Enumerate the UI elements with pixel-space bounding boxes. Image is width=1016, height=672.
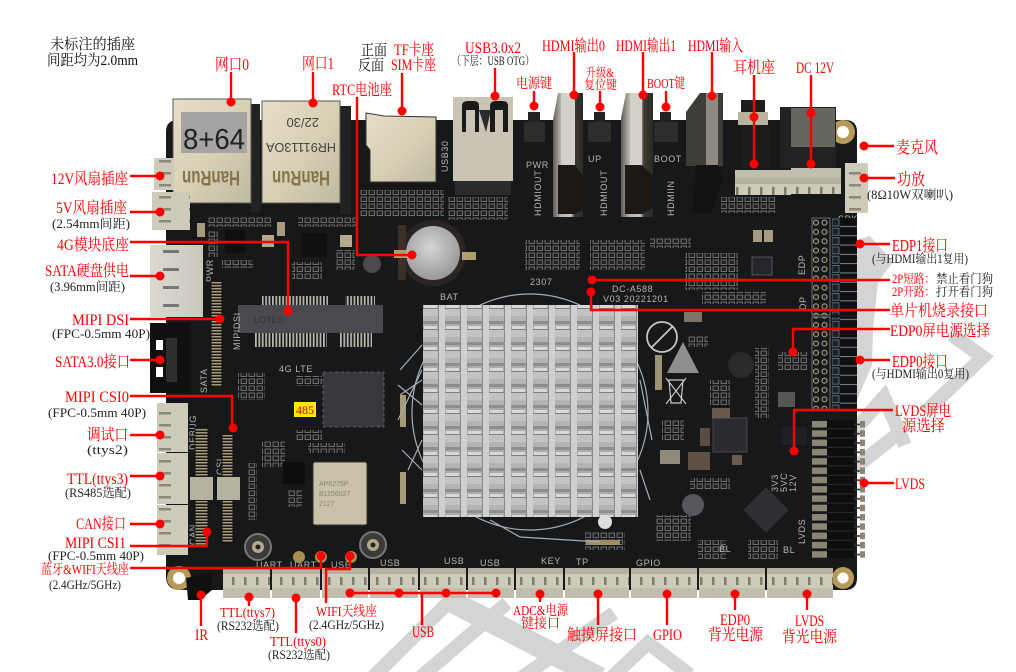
board silkscreen: 5VC — [779, 473, 789, 492]
label: GPIO — [653, 590, 682, 644]
label: ADC&电源键接口 — [513, 590, 569, 632]
board silkscreen: BL — [783, 545, 795, 555]
board silkscreen — [188, 140, 858, 570]
label: LVDS屏电源选择: 源选择 — [902, 417, 945, 435]
CAN connector — [157, 505, 188, 555]
label: LVDS屏电源选择 — [790, 402, 951, 456]
label: DC 12V — [796, 60, 834, 168]
DC 12V jack — [780, 107, 836, 168]
label: TTL(ttys7) — [217, 592, 279, 633]
label: 5V风扇插座: 5V风扇插座 — [56, 198, 127, 217]
board silkscreen: LVDS — [797, 519, 807, 544]
WiFi module — [313, 462, 367, 525]
label: 蓝牙&WIFI天线座: (2.4GHz/5GHz) — [49, 578, 121, 592]
board silkscreen: SATA — [199, 368, 209, 393]
note: unlabelled pitch: 间距均为2.0mm — [47, 52, 138, 69]
label: USB3.0x2: USB3.0x2 — [465, 40, 521, 57]
HDMI output 1 — [621, 93, 653, 217]
board silkscreen: EDP — [797, 255, 807, 275]
label: 功放: 功放 — [897, 170, 925, 189]
label: WIFI天线座 — [309, 552, 384, 632]
label: WIFI天线座: (2.4GHz/5GHz) — [309, 618, 384, 632]
ethernet port 1: HanRun — [272, 166, 330, 189]
label: 看门狗: 2P开路： — [892, 285, 935, 299]
label: LVDS: LVDS — [895, 476, 925, 493]
Pb free mark — [647, 322, 677, 352]
label: LVDS背光电源: 背光电源 — [782, 628, 838, 646]
label: MIPI DSI — [52, 312, 224, 341]
label: SATA硬盘供电 — [45, 262, 164, 294]
label: USB3.0x2: （下层：USB OTG） — [452, 54, 534, 68]
HDMI input — [686, 93, 723, 213]
label: 5V风扇插座: (2.54mm间距) — [52, 216, 130, 231]
label: HDMI输出1 — [616, 37, 676, 100]
board silkscreen: 2307 — [530, 277, 552, 287]
RTC battery — [394, 220, 476, 286]
mini PCIe 4G socket — [238, 296, 383, 347]
EDP1 header — [812, 218, 857, 315]
label: LVDS — [860, 476, 925, 493]
label: MIPI CSI1 — [48, 528, 212, 563]
USB3.0 port — [453, 97, 513, 195]
power button — [524, 112, 545, 142]
mounting hole top right — [831, 120, 855, 144]
FPC connectors — [190, 280, 240, 547]
heatsink — [398, 294, 652, 542]
board silkscreen: PWR — [526, 160, 549, 170]
ethernet port 1: HR91113OA — [266, 140, 336, 155]
capacitors and small parts — [197, 222, 773, 545]
label: 触摸屏接口 — [567, 590, 637, 644]
speaker connector — [845, 163, 868, 213]
label: 正面 反面: 反面 — [358, 57, 384, 74]
label: GPIO: GPIO — [653, 627, 682, 644]
label: LVDS背光电源 — [782, 590, 838, 646]
SATA 3.0 connector — [150, 323, 190, 393]
label: EDP0接口: EDP0接口 — [892, 352, 948, 371]
label: MIPI CSI1: (FPC-0.5mm 40P) — [48, 549, 144, 563]
watermark background — [370, 236, 983, 672]
label: BOOT键: BOOT键 — [647, 75, 685, 92]
label: 看门狗: 打开看门狗 — [936, 284, 993, 299]
label: 正面 反面 — [358, 42, 387, 74]
label: TF卡座 SIM卡座: SIM卡座 — [391, 56, 436, 74]
board silkscreen: UP — [588, 154, 602, 164]
label: RTC电池座 — [332, 81, 416, 260]
board silkscreen: 3V3 — [770, 474, 780, 492]
board silkscreen: SPK — [838, 214, 858, 224]
label: 正面 反面: 正面 — [361, 42, 387, 59]
board silkscreen: MIPIDSI — [232, 312, 242, 350]
label: TTL(ttys7): TTL(ttys7) — [220, 606, 275, 621]
board silkscreen: USB — [480, 558, 500, 568]
label: 耳机座 — [733, 58, 775, 168]
mounting hole bottom right — [832, 567, 854, 589]
label: HDMI输入: HDMI输入 — [688, 37, 743, 55]
yellow 485 marker — [294, 402, 316, 417]
label: 功放 — [860, 170, 953, 202]
label: MIPI CSI0: MIPI CSI0 — [65, 389, 129, 406]
fan connector 5V — [152, 192, 190, 230]
board silkscreen: TP — [576, 557, 589, 567]
label: 电源键: 电源键 — [516, 75, 552, 92]
label: EDP1接口: (与HDMI输出1复用) — [872, 251, 968, 266]
WiFi module: AP6275P — [319, 481, 349, 488]
TTL connector — [157, 453, 188, 504]
IR receiver — [186, 572, 212, 600]
boot button — [654, 112, 678, 142]
label: 麦克风: 麦克风 — [896, 138, 938, 157]
label: SATA硬盘供电: (3.96mm间距) — [50, 279, 125, 294]
TF and SIM card socket — [366, 113, 436, 182]
board silkscreen: USB30 — [440, 140, 450, 172]
label: TTL(ttys3): (RS485选配) — [65, 485, 131, 500]
label: 网口0: 网口0 — [215, 55, 249, 74]
SATA power connector — [150, 245, 203, 317]
label: TTL(ttys0) — [268, 594, 330, 662]
upgrade button — [588, 112, 611, 142]
label: 耳机座: 耳机座 — [733, 58, 775, 77]
label: TTL(ttys7): (RS232选配) — [217, 618, 279, 633]
mini PCIe 4G socket: LOTES — [254, 315, 284, 325]
label: 麦克风 — [860, 138, 938, 157]
board silkscreen: USB — [331, 560, 351, 570]
label: 调试口: 调试口 — [87, 426, 128, 444]
label: TTL(ttys3): TTL(ttys3) — [67, 471, 128, 488]
bottom connector row — [223, 568, 833, 598]
board silkscreen: DEBUG — [188, 415, 198, 450]
label: 调试口: (ttys2) — [87, 443, 128, 457]
label: EDP0屏电源选择: EDP0屏电源选择 — [890, 322, 990, 340]
label: TTL(ttys0): (RS232选配) — [268, 647, 330, 662]
label: EDP0背光电源: 背光电源 — [708, 626, 764, 644]
chips — [225, 230, 807, 533]
label: DC 12V: DC 12V — [796, 60, 834, 77]
label: RTC电池座: RTC电池座 — [332, 81, 392, 99]
label: 单片机烧录接口: 单片机烧录接口 — [890, 302, 988, 320]
label: TF卡座 SIM卡座 — [391, 41, 436, 116]
board silkscreen: USB — [444, 556, 464, 566]
board silkscreen: PWR — [205, 259, 215, 282]
LVDS pin header — [812, 420, 865, 558]
label: 电源键 — [516, 75, 552, 110]
label: 调试口 — [87, 426, 164, 457]
board silkscreen: CAN — [188, 524, 198, 545]
label: 看门狗 — [588, 271, 993, 299]
label: 功放: (8Ω10W双喇叭) — [867, 187, 953, 202]
HDMI output 0 — [553, 93, 583, 217]
label: MIPI DSI: (FPC-0.5mm 40P) — [52, 327, 150, 341]
label: BOOT键 — [647, 75, 685, 112]
ethernet port 0 — [173, 99, 260, 212]
antenna and standoffs — [245, 532, 386, 563]
circuit board — [150, 93, 868, 600]
board base — [166, 120, 857, 590]
debug connector — [157, 403, 188, 452]
label: 升级&复位键: 升级& — [586, 65, 614, 80]
yellow 485 marker: 485 — [296, 405, 314, 417]
label: TF卡座 SIM卡座: TF卡座 — [394, 41, 434, 59]
top white connectors — [735, 168, 841, 195]
label: EDP0背光电源: EDP0 — [720, 612, 750, 629]
board silkscreen: KEY — [541, 556, 561, 566]
board silkscreen: GPIO — [636, 558, 661, 568]
label: 网口1: 网口1 — [302, 54, 334, 73]
label: 4G模块底座: 4G模块底座 — [57, 235, 129, 254]
ethernet port 1: 22/30 — [286, 115, 319, 130]
board silkscreen: 12V — [788, 474, 798, 492]
ethernet port 0: HanRun — [182, 166, 240, 189]
label: SATA3.0接口: SATA3.0接口 — [55, 353, 130, 371]
board silkscreen: BL — [719, 544, 731, 554]
label: TTL(ttys0): TTL(ttys0) — [270, 635, 326, 650]
board silkscreen: HDMIOUT — [533, 170, 543, 216]
label: 升级&复位键: 复位键 — [584, 77, 617, 92]
label: EDP0屏电源选择 — [788, 322, 990, 356]
board silkscreen: HDMIIN — [666, 180, 676, 216]
label: MIPI CSI0 — [48, 389, 238, 432]
label: MIPI CSI1: MIPI CSI1 — [65, 535, 126, 552]
label: EDP1接口 — [856, 236, 968, 266]
label: 触摸屏接口: 触摸屏接口 — [567, 625, 637, 644]
headphone jack — [738, 100, 770, 168]
label: IR — [195, 590, 208, 644]
label: MIPI CSI0: (FPC-0.5mm 40P) — [48, 406, 146, 420]
label: EDP0接口 — [856, 352, 969, 381]
note: unlabelled pitch — [47, 35, 138, 69]
board silkscreen: DP — [798, 296, 808, 310]
label: WIFI天线座: WIFI天线座 — [316, 603, 377, 620]
label: 升级&复位键 — [584, 65, 617, 112]
label: HDMI输出0 — [542, 37, 605, 100]
label: EDP0背光电源 — [708, 590, 764, 644]
label: HDMI输入 — [688, 37, 743, 100]
label: EDP1接口: EDP1接口 — [892, 236, 948, 255]
WiFi module: B1156027 — [319, 491, 351, 498]
label: MIPI DSI: MIPI DSI — [72, 312, 129, 329]
board silkscreen: UART — [290, 560, 317, 570]
board silkscreen: HDMIOUT — [599, 170, 609, 216]
label: IR: IR — [195, 627, 208, 644]
label: SATA硬盘供电: SATA硬盘供电 — [45, 262, 129, 280]
label: 网口1 — [302, 54, 334, 108]
recycle bin mark — [666, 378, 686, 404]
label: 蓝牙&WIFI天线座: 蓝牙&WIFI天线座 — [41, 561, 129, 578]
board silkscreen: 4G LTE — [279, 364, 313, 374]
board silkscreen: V03 20221201 — [603, 294, 669, 304]
SMD clutter — [208, 190, 807, 560]
board silkscreen: USB — [380, 558, 400, 568]
label: 4G模块底座 — [57, 235, 292, 316]
label: 蓝牙&WIFI天线座 — [41, 552, 326, 592]
label: HDMI输出0: HDMI输出0 — [542, 37, 605, 55]
label: 网口0 — [215, 55, 249, 106]
note: unlabelled pitch: 未标注的插座 — [50, 35, 135, 53]
fan connector 12V — [154, 158, 174, 190]
label: EDP0接口: (与HDMI输出0复用) — [872, 366, 969, 381]
label: 单片机烧录接口 — [586, 288, 988, 320]
label: USB3.0x2 — [452, 40, 534, 100]
WiFi module: 2127 — [319, 501, 335, 508]
label: LVDS屏电源选择: LVDS屏电 — [895, 402, 951, 420]
label: HDMI输出1: HDMI输出1 — [616, 37, 676, 55]
board silkscreen: CSI — [215, 458, 225, 475]
label: TTL(ttys3) — [65, 471, 164, 500]
board silkscreen: DC-A588 — [612, 284, 653, 294]
board silkscreen: UART — [256, 560, 283, 570]
ethernet port 0: 8+64 — [183, 124, 245, 156]
label: CAN接口: CAN接口 — [76, 515, 126, 533]
label: USB: USB — [412, 624, 434, 641]
EDP0 header — [812, 317, 857, 410]
label: ADC&电源键接口: 键接口 — [521, 615, 560, 632]
label: 看门狗: 禁止看门狗 — [936, 271, 993, 286]
label: 12V风扇插座: 12V风扇插座 — [51, 169, 128, 188]
label: LVDS背光电源: LVDS — [795, 613, 824, 630]
label: ADC&电源键接口: ADC&电源 — [513, 602, 569, 619]
board silkscreen: BOOT — [654, 154, 682, 164]
label: USB — [346, 588, 500, 641]
label: 看门狗: 2P短路： — [892, 272, 935, 286]
board silkscreen: BAT — [440, 292, 459, 302]
mounting hole bottom left — [167, 566, 191, 590]
ethernet port 1 — [262, 101, 351, 214]
label: 5V风扇插座 — [52, 198, 164, 231]
ESD warning triangle — [667, 342, 699, 373]
